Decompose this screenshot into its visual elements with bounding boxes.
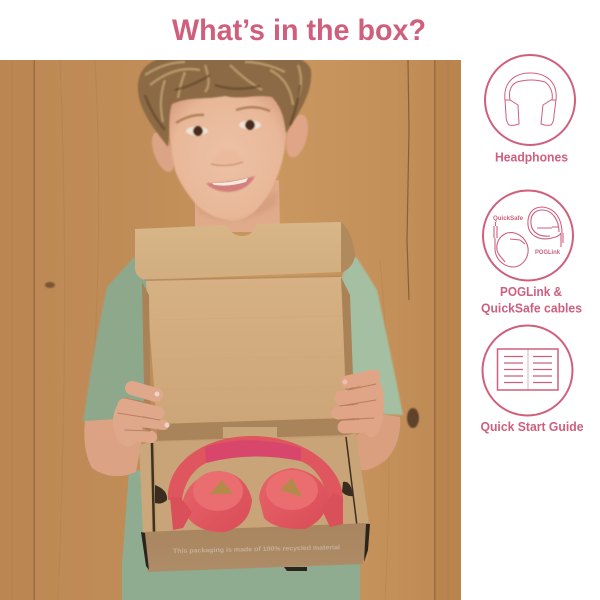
box lid flap bbox=[135, 222, 341, 280]
boy: arms bbox=[84, 414, 400, 476]
icon: cables in circle bbox=[483, 190, 573, 280]
eyes bbox=[186, 120, 261, 136]
item: quick start guide bbox=[480, 326, 584, 434]
photo: boy holding open box bbox=[0, 48, 461, 600]
boy: left hand bbox=[113, 388, 170, 446]
tray bbox=[139, 435, 369, 533]
nose bbox=[222, 154, 233, 162]
tray finger notches bbox=[155, 485, 167, 504]
box front panel bbox=[141, 523, 370, 572]
right hinge bbox=[324, 497, 343, 527]
mouth bbox=[206, 176, 255, 192]
wood wall background bbox=[0, 60, 461, 600]
boy: green t-shirt bbox=[83, 255, 403, 600]
label: cables bbox=[481, 285, 582, 316]
boy: neck and head bbox=[138, 48, 312, 232]
lid side tab bbox=[341, 222, 355, 273]
box front panel: This packaging is made of 100% recycled material bbox=[173, 544, 340, 555]
label: cables: QuickSafe cables bbox=[481, 302, 582, 316]
left ear cup bbox=[183, 471, 252, 532]
item: headphones bbox=[485, 55, 575, 164]
left hinge bbox=[170, 497, 192, 530]
headband bbox=[168, 436, 343, 502]
icon: cables in circle: QuickSafe bbox=[493, 215, 523, 222]
hair bbox=[137, 60, 312, 147]
box lid inner panel bbox=[146, 277, 346, 426]
open cardboard box bbox=[135, 222, 370, 572]
title: What’s in the box? bbox=[172, 14, 426, 47]
boy: right hand bbox=[338, 373, 384, 437]
pink headphones bbox=[168, 436, 343, 532]
icon: headphones in circle bbox=[485, 55, 575, 145]
back wall shadow band bbox=[156, 418, 348, 442]
label: headphones: Headphones bbox=[495, 150, 568, 164]
item: cables bbox=[481, 190, 582, 316]
icon: cables in circle: POGLink bbox=[535, 249, 560, 256]
label: quick start guide: Quick Start Guide bbox=[480, 420, 584, 434]
icon: open book in circle bbox=[482, 326, 572, 416]
right ear cup bbox=[259, 468, 329, 529]
label: cables: POGLink & bbox=[500, 285, 562, 299]
eyebrows bbox=[176, 107, 270, 123]
